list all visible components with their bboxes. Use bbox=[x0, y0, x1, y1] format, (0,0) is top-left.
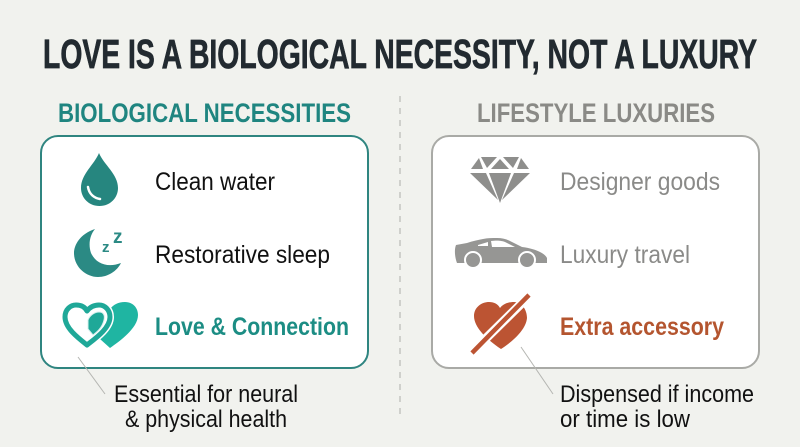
heading: lifestyle luxuries: LIFESTYLE LUXURIES bbox=[477, 98, 715, 128]
panel: lifestyle luxuries bbox=[432, 136, 759, 368]
icon: crossed-out heart bbox=[465, 293, 532, 359]
callout: lifestyle luxuries: Dispensed if income bbox=[560, 381, 754, 408]
label: love and connection: Love & Connection bbox=[155, 313, 349, 341]
label: restorative sleep: Restorative sleep bbox=[155, 241, 330, 269]
label: luxury travel: Luxury travel bbox=[560, 241, 690, 269]
icon: water drop bbox=[81, 153, 118, 206]
heading: biological necessities: BIOLOGICAL NECESSITIES bbox=[58, 98, 351, 128]
icon: two hearts bbox=[65, 302, 138, 348]
icon: moon with z letters: z bbox=[113, 227, 122, 248]
callout: lifestyle luxuries: or time is low bbox=[560, 406, 691, 433]
icon: moon with z letters: z bbox=[102, 239, 110, 256]
icon: diamond bbox=[470, 157, 530, 203]
callout: biological necessities: Essential for neural bbox=[114, 381, 298, 408]
label: clean water: Clean water bbox=[155, 168, 275, 196]
label: extra accessory: Extra accessory bbox=[560, 313, 724, 341]
label: designer goods: Designer goods bbox=[560, 168, 720, 196]
icon: car bbox=[455, 238, 547, 268]
callout: biological necessities bbox=[78, 357, 298, 433]
icon: moon with z letters bbox=[74, 227, 122, 277]
callout: lifestyle luxuries bbox=[521, 347, 754, 433]
panel: biological necessities bbox=[41, 136, 368, 368]
callout: biological necessities: & physical health bbox=[125, 406, 287, 433]
